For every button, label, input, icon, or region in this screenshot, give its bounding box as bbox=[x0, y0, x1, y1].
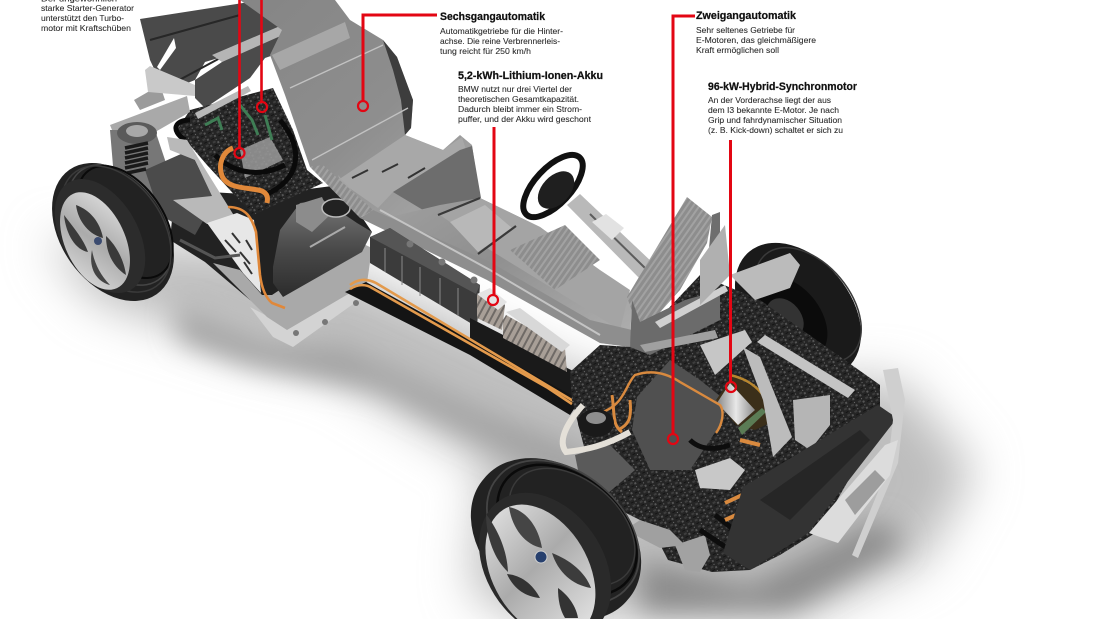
text block: Hybrid-Synchronmotor: An der Vorderachse liegt der aus bbox=[708, 96, 831, 105]
text block: Lithium-Ionen-Akku: Dadurch bleibt immer ein Strom- bbox=[458, 105, 582, 114]
front bumper beam bbox=[723, 368, 905, 570]
orange high-voltage hose bbox=[220, 148, 267, 203]
rear body: firewall, engine compartment shell and rear tub bbox=[134, 0, 481, 220]
front footwell panel bbox=[627, 197, 728, 355]
coil spring bbox=[125, 143, 148, 173]
text block: Sechsgangautomatik bbox=[440, 11, 563, 56]
rear wheel bbox=[27, 140, 199, 324]
callout leader: battery bbox=[488, 127, 498, 305]
front rim bbox=[485, 505, 595, 619]
text block: Lithium-Ionen-Akku: puffer, und der Akku wird geschont bbox=[458, 115, 592, 124]
text block: Hybrid-Synchronmotor: Grip und fahrdynamischer Situation bbox=[708, 116, 842, 125]
text block: starter generator: unterstützt den Turbo- bbox=[41, 14, 124, 23]
text block: starter generator: motor mit Kraftschüben bbox=[41, 24, 131, 33]
text block: Zweigangautomatik: Kraft ermöglichen soll bbox=[696, 46, 779, 55]
far front wheel bbox=[709, 218, 887, 402]
steering wheel and column bbox=[513, 145, 654, 281]
engine compartment bbox=[176, 86, 323, 215]
rear dark bulkhead bbox=[140, 3, 290, 92]
text block: Sechsgangautomatik: Automatikgetriebe für die Hinter- bbox=[440, 27, 563, 36]
text block: Lithium-Ionen-Akku bbox=[458, 70, 603, 124]
text block: Hybrid-Synchronmotor bbox=[708, 81, 858, 135]
text block: Hybrid-Synchronmotor: 96-kW-Hybrid-Synchronmotor bbox=[708, 81, 858, 93]
electric motor bbox=[600, 372, 776, 520]
text block: Sechsgangautomatik: Sechsgangautomatik bbox=[440, 11, 546, 23]
front wheel bbox=[471, 458, 641, 619]
silver upper tub bbox=[240, 0, 480, 220]
text block: Zweigangautomatik bbox=[696, 10, 817, 55]
text block: Lithium-Ionen-Akku: BMW nutzt nur drei Viertel der bbox=[458, 85, 572, 94]
orange motor cables bbox=[600, 372, 723, 433]
underbody rail with orange cables bbox=[345, 280, 580, 415]
orange rear cable bbox=[228, 207, 285, 308]
fuel tank bbox=[273, 197, 372, 297]
light shelf behind engine bbox=[134, 26, 300, 110]
text block: starter generator bbox=[41, 0, 134, 33]
callout leader: six-speed automatic bbox=[358, 15, 437, 111]
text block: Zweigangautomatik: E-Motoren, das gleichmäßigere bbox=[696, 36, 817, 45]
ground shadow bbox=[45, 240, 975, 619]
front upper control arm bbox=[563, 405, 635, 500]
underfloor frame and plate bbox=[213, 240, 372, 347]
callout leader: starter-generator top line 1 bbox=[234, 0, 244, 158]
high-voltage battery bbox=[370, 228, 592, 408]
dark machinery under rear bbox=[170, 185, 372, 312]
text block: Zweigangautomatik: Zweigangautomatik bbox=[696, 10, 797, 22]
text block: Sechsgangautomatik: achse. Die reine Verbrennerleis- bbox=[440, 37, 560, 46]
text block: Lithium-Ionen-Akku: theoretischen Gesamtkapazität. bbox=[458, 95, 579, 104]
text block: Zweigangautomatik: Sehr seltenes Getriebe für bbox=[696, 26, 795, 35]
passenger floor and centre tunnel bbox=[310, 165, 632, 347]
rear suspension and silver frame parts bbox=[110, 96, 261, 293]
text block: Lithium-Ionen-Akku: 5,2-kWh-Lithium-Ionen-Akku bbox=[458, 70, 603, 82]
callout leader: two-speed automatic bbox=[668, 16, 695, 444]
text block: Hybrid-Synchronmotor: (z. B. Kick-down) schaltet er sich zu bbox=[708, 126, 843, 135]
callout leader: engine line 2 bbox=[257, 0, 267, 112]
text block: Sechsgangautomatik: tung reicht für 250 km/h bbox=[440, 47, 531, 56]
front drivetrain mass bbox=[570, 275, 880, 572]
callout leader: synchronous motor bbox=[726, 140, 736, 392]
rear rim bbox=[46, 181, 144, 301]
text block: Hybrid-Synchronmotor: dem I3 bekannte E-Motor. Je nach bbox=[708, 106, 839, 115]
text block: starter generator: starke Starter-Generator bbox=[41, 4, 134, 13]
front silver frame bbox=[700, 225, 855, 457]
